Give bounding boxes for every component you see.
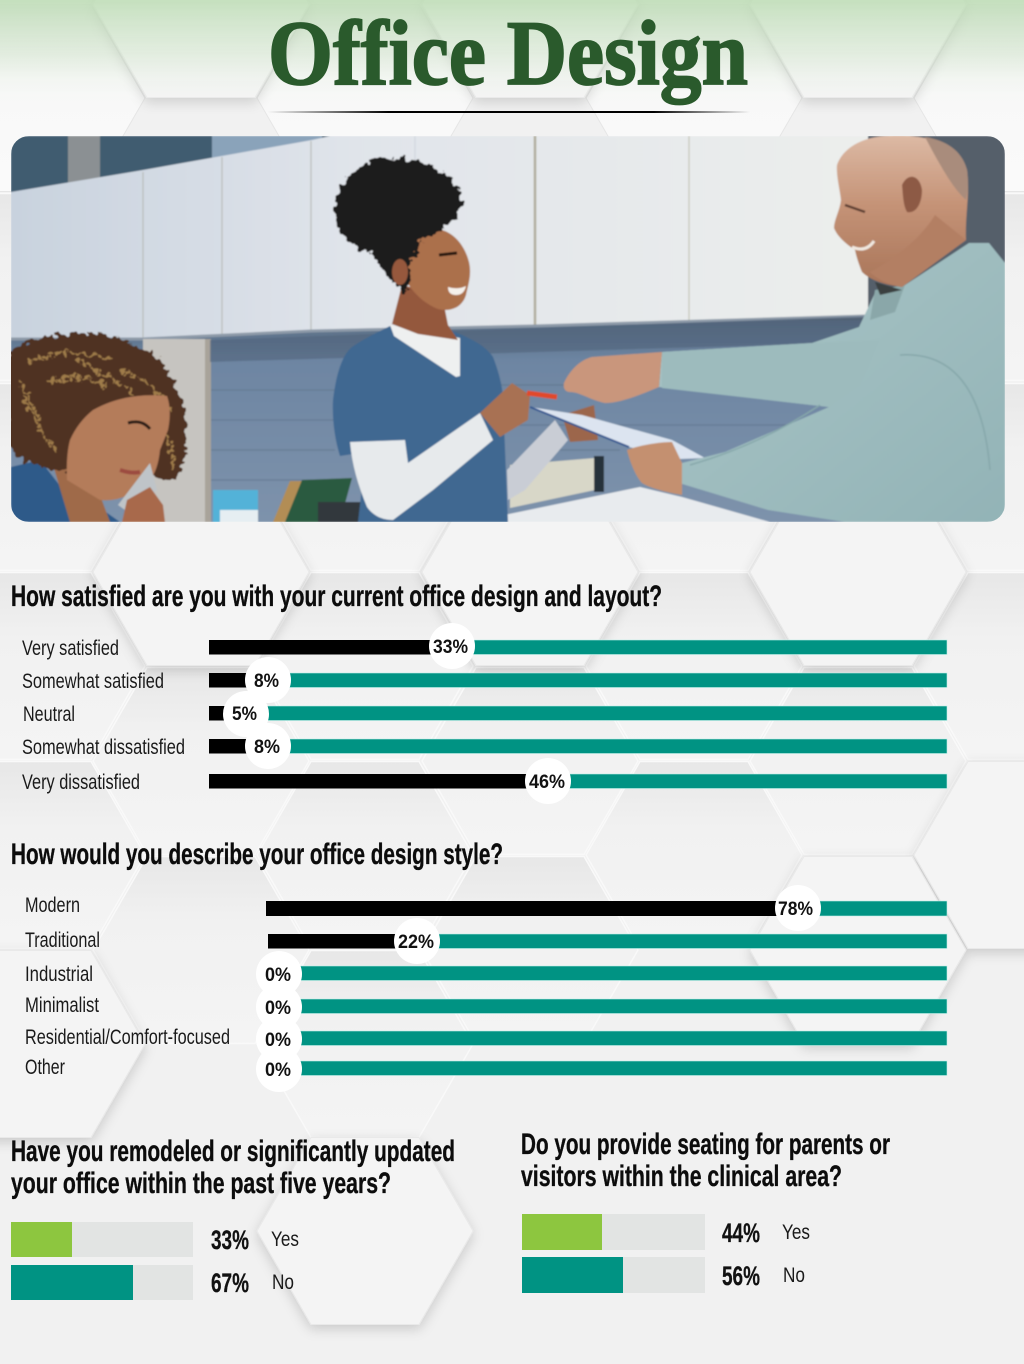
row: very satisfied xyxy=(22,623,947,669)
row: very satisfied: Very satisfied xyxy=(22,637,119,660)
row: residential xyxy=(25,1016,947,1062)
heading: seating: visitors within the clinical area? xyxy=(521,1160,842,1193)
row: modern: 78% xyxy=(778,899,813,920)
row: industrial: 0% xyxy=(265,965,291,986)
row: other: Other xyxy=(25,1056,65,1079)
row: residential: Residential/Comfort-focused xyxy=(25,1026,230,1049)
yes bar xyxy=(11,1222,299,1257)
row: other: 0% xyxy=(265,1060,291,1081)
heading: remodeled: Have you remodeled or significantly updated xyxy=(11,1135,455,1168)
row: neutral xyxy=(23,691,947,737)
heading: seating xyxy=(521,1128,890,1193)
row: neutral: 5% xyxy=(232,704,257,725)
panel: seating xyxy=(521,1128,890,1293)
row: minimalist xyxy=(25,984,947,1030)
row: very dissatisfied: Very dissatisfied xyxy=(22,771,140,794)
yes bar: 33% xyxy=(211,1225,249,1255)
yes bar: 44% xyxy=(722,1218,760,1248)
no bar: No xyxy=(783,1264,805,1287)
no bar xyxy=(11,1265,294,1300)
row: very dissatisfied xyxy=(22,758,947,804)
panel: remodeled xyxy=(11,1135,455,1300)
row: somewhat satisfied: 8% xyxy=(254,671,279,692)
row: somewhat dissatisfied: 8% xyxy=(254,737,280,758)
yes bar: Yes xyxy=(782,1221,810,1244)
chart: satisfaction bars xyxy=(22,623,947,804)
woman left xyxy=(8,333,186,522)
photo: reception desk with staff and patient xyxy=(8,136,1005,522)
row: minimalist: 0% xyxy=(265,998,291,1019)
title: Office Design xyxy=(268,2,748,104)
man right xyxy=(564,136,1005,522)
no bar: 56% xyxy=(722,1261,760,1291)
row: somewhat satisfied xyxy=(22,657,947,703)
heading: design style: How would you describe your office design style? xyxy=(11,838,503,871)
row: neutral: Neutral xyxy=(23,703,75,726)
row: somewhat dissatisfied: Somewhat dissatisfied xyxy=(22,736,185,759)
row: other xyxy=(25,1046,947,1092)
row: residential: 0% xyxy=(265,1030,291,1051)
row: very satisfied: 33% xyxy=(433,637,468,658)
row: traditional: Traditional xyxy=(25,929,100,952)
chart: design style bars xyxy=(25,885,947,1092)
no bar: No xyxy=(272,1271,294,1294)
row: modern xyxy=(25,885,947,931)
no bar xyxy=(522,1257,805,1293)
pen and clipboard xyxy=(527,393,557,397)
row: somewhat dissatisfied xyxy=(22,723,947,769)
row: traditional xyxy=(25,918,947,964)
heading: satisfaction: How satisfied are you with your current office design and layout? xyxy=(11,580,662,613)
woman centre xyxy=(333,158,598,522)
yes bar: Yes xyxy=(271,1228,299,1251)
heading: remodeled: your office within the past five years? xyxy=(11,1167,391,1200)
no bar: 67% xyxy=(211,1268,249,1298)
row: traditional: 22% xyxy=(398,932,434,953)
row: somewhat satisfied: Somewhat satisfied xyxy=(22,670,164,693)
row: modern: Modern xyxy=(25,894,80,917)
yes bar xyxy=(522,1214,810,1250)
row: industrial: Industrial xyxy=(25,963,93,986)
row: minimalist: Minimalist xyxy=(25,994,99,1017)
row: very dissatisfied: 46% xyxy=(529,772,565,793)
heading: remodeled xyxy=(11,1135,455,1200)
row: industrial xyxy=(25,951,947,997)
title underline xyxy=(268,111,750,113)
